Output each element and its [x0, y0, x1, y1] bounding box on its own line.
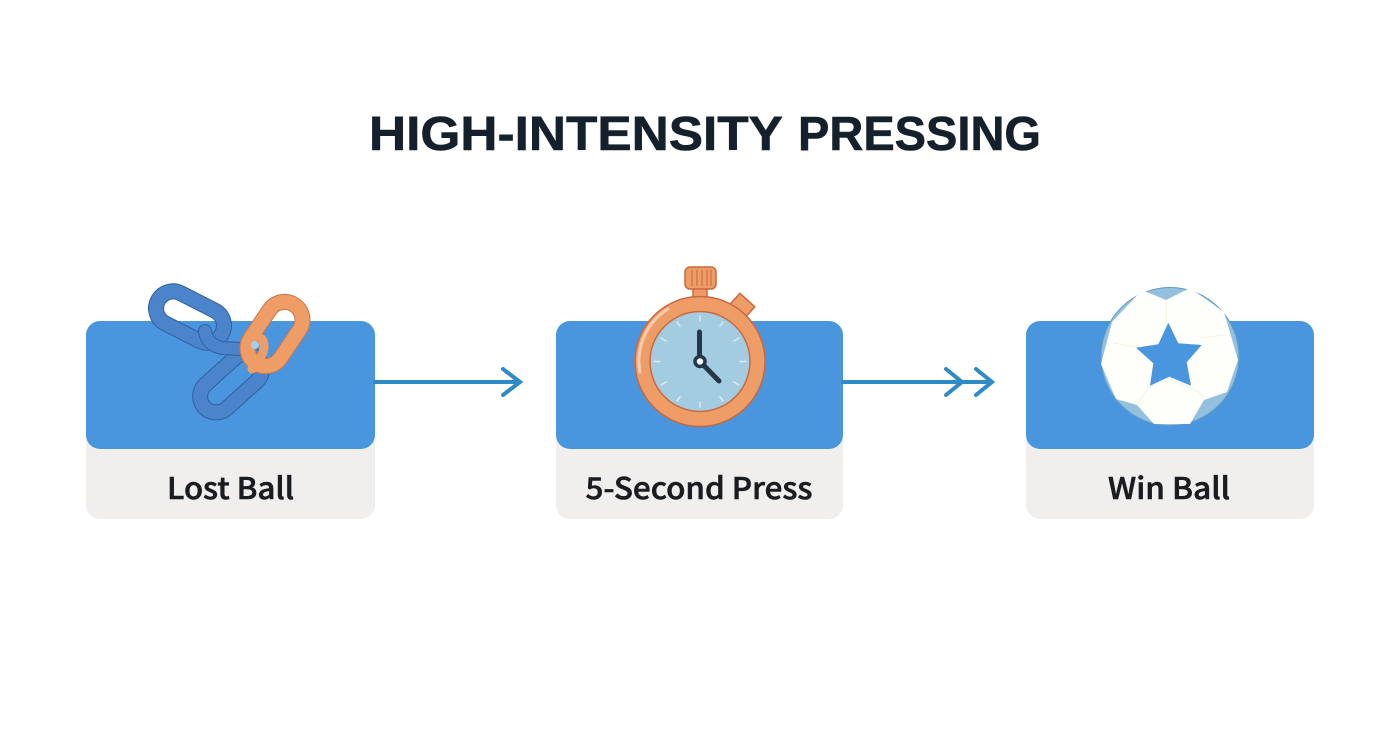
stopwatch crown: [685, 267, 716, 289]
arrow: single: [375, 369, 520, 395]
chain link: orange: [241, 295, 309, 373]
label: press: 5-Second Press: [586, 464, 812, 508]
stopwatch hands: [695, 332, 719, 381]
panel: five second press: [556, 267, 843, 519]
stopwatch side button: [729, 293, 755, 319]
panel: win ball: [1026, 288, 1314, 519]
icon: soccer ball: [1101, 288, 1239, 426]
label card: lost ball: [86, 400, 375, 519]
ball white panels: [1101, 288, 1238, 424]
blue card: win ball: [1026, 321, 1314, 449]
stopwatch neck: [693, 282, 707, 299]
icon: broken chain: [150, 286, 309, 419]
title: HIGH-INTENSITY: [369, 108, 783, 161]
chain link: upper blue: [150, 286, 230, 348]
face ticks: [654, 316, 746, 407]
ball seams: [1114, 300, 1226, 405]
label card: press: [556, 400, 843, 519]
stopwatch case: [635, 296, 765, 426]
ball star: [1136, 323, 1202, 386]
chain highlight: [251, 341, 259, 349]
label: lost ball: Lost Ball: [167, 464, 294, 508]
chain connector: [205, 331, 240, 349]
case highlight: [639, 309, 668, 372]
label: win ball: Win Ball: [1108, 464, 1230, 508]
stopwatch face: [650, 312, 750, 412]
title: PRESSING: [798, 108, 1041, 161]
ball base: [1101, 288, 1239, 426]
blue card: lost ball: [86, 321, 375, 449]
chain link: lower blue: [194, 347, 268, 419]
panel: lost ball: [86, 286, 375, 519]
label card: win ball: [1026, 400, 1314, 519]
arrow: double: [843, 369, 992, 395]
blue card: press: [556, 321, 843, 449]
icon: stopwatch: [635, 267, 765, 426]
